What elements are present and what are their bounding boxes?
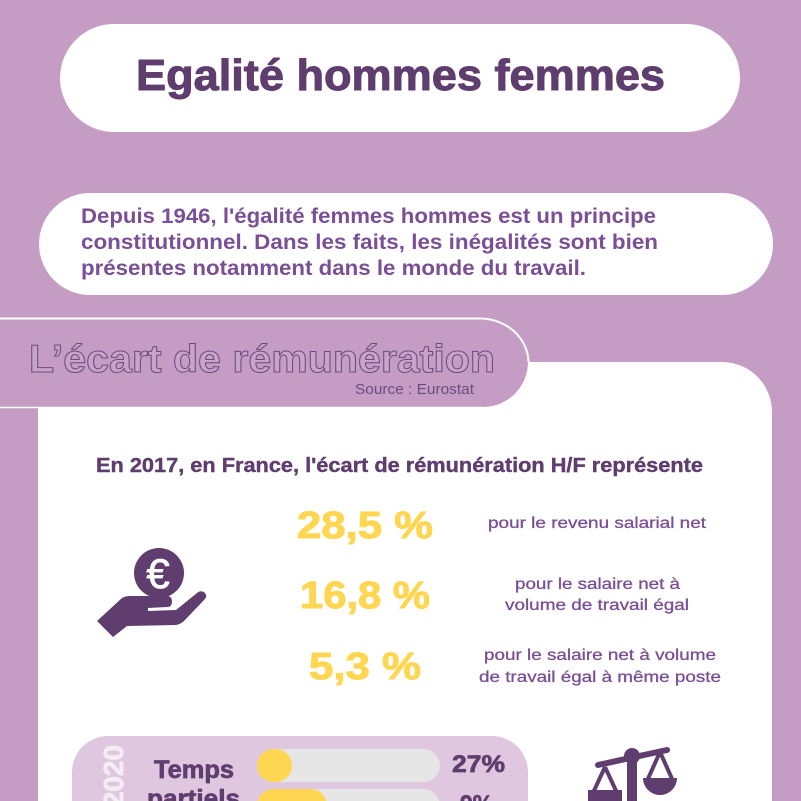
icon: hand holding euro coin: € — [146, 550, 170, 597]
section heading band: L’écart de rémunération — [29, 338, 495, 381]
stat: 28,5 %: 28,5 % — [297, 505, 433, 547]
stat: 28,5 %: pour le revenu salarial net — [488, 515, 707, 532]
category label — [147, 756, 240, 801]
stat: 16,8 %: 16,8 % — [300, 575, 430, 617]
intro text block: présentes notamment dans le monde du travail. — [81, 257, 586, 280]
stat: 28,5 % — [297, 505, 707, 547]
category label: Temps — [154, 756, 234, 784]
icon: hand holding euro coin — [97, 548, 206, 637]
stat: 16,8 %: pour le salaire net à — [515, 576, 680, 593]
panel: bar chart temps partiels — [72, 736, 528, 801]
stat: 5,3 %: de travail égal à même poste — [479, 669, 721, 686]
section heading band — [0, 318, 528, 408]
panel: écart de rémunération — [0, 318, 772, 801]
stat: 16,8 % — [300, 575, 689, 617]
icon: scales of justice — [588, 748, 677, 801]
stat: 16,8 %: volume de travail égal — [505, 597, 689, 614]
title: Egalité hommes femmes — [136, 51, 665, 100]
intro text block: constitutionnel. Dans les faits, les inégalités sont bien — [81, 231, 658, 254]
stat: 5,3 %: 5,3 % — [309, 646, 421, 688]
stat: 5,3 %: pour le salaire net à volume — [484, 647, 716, 664]
title — [60, 24, 740, 132]
section heading band: Source : Eurostat — [355, 382, 474, 398]
bar: 27% — [257, 749, 505, 782]
bar: 27%: 27% — [452, 751, 505, 778]
intro text block — [39, 193, 773, 295]
intro text block: Depuis 1946, l'égalité femmes hommes est un principe — [81, 205, 656, 228]
subheading: En 2017, en France, l'écart de rémunération H/F représente — [96, 455, 703, 477]
bar: 9% — [257, 789, 493, 801]
stat: 5,3 % — [309, 646, 721, 688]
